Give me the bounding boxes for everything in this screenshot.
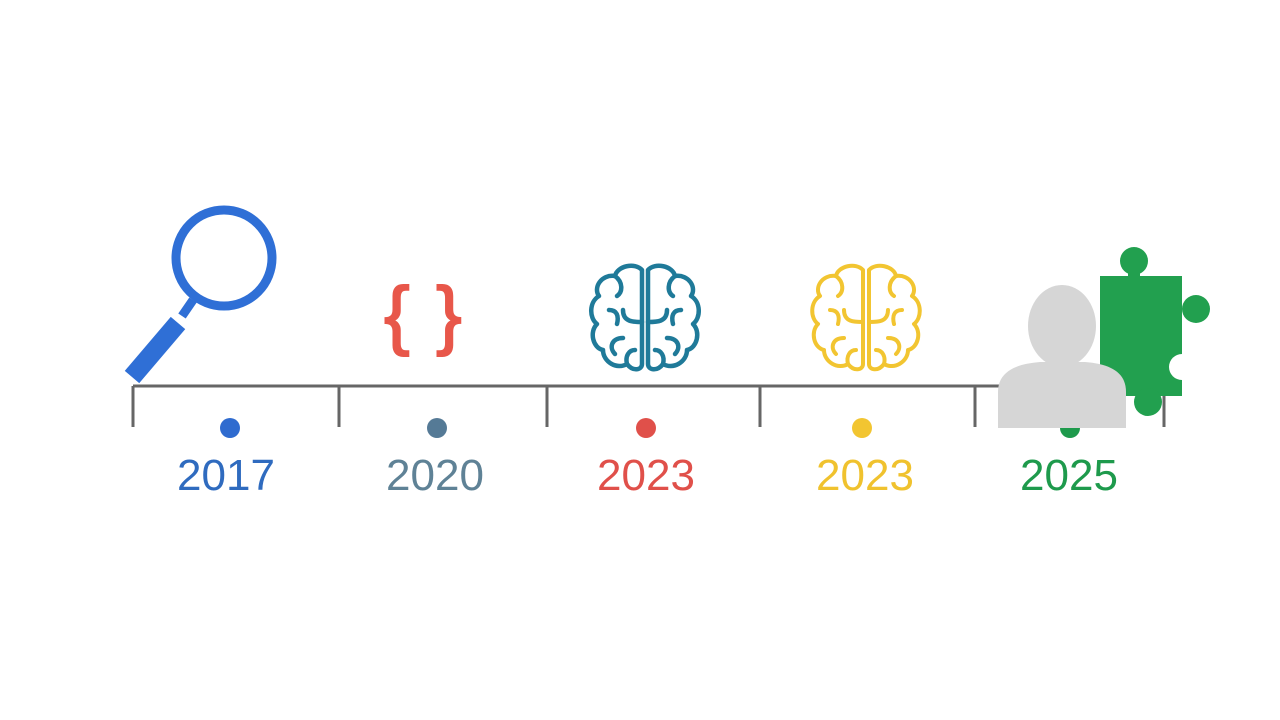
icon: yellow brain — [812, 266, 920, 369]
icon: puzzle piece — [1100, 247, 1210, 416]
icon: curly braces: } — [436, 272, 462, 357]
icon: curly braces — [384, 272, 462, 357]
icon: curly braces: { — [384, 272, 410, 357]
year labels: 2023 — [597, 451, 695, 500]
icon: teal brain — [591, 266, 699, 369]
year labels: 2020 — [386, 451, 484, 500]
icon: person silhouette — [998, 285, 1126, 428]
year labels — [177, 451, 1118, 500]
dots — [220, 418, 1080, 438]
year labels: 2017 — [177, 451, 275, 500]
year labels: 2023 — [816, 451, 914, 500]
icon: magnifying glass — [132, 210, 272, 377]
year labels: 2025 — [1020, 451, 1118, 500]
timeline axis — [133, 386, 1165, 427]
